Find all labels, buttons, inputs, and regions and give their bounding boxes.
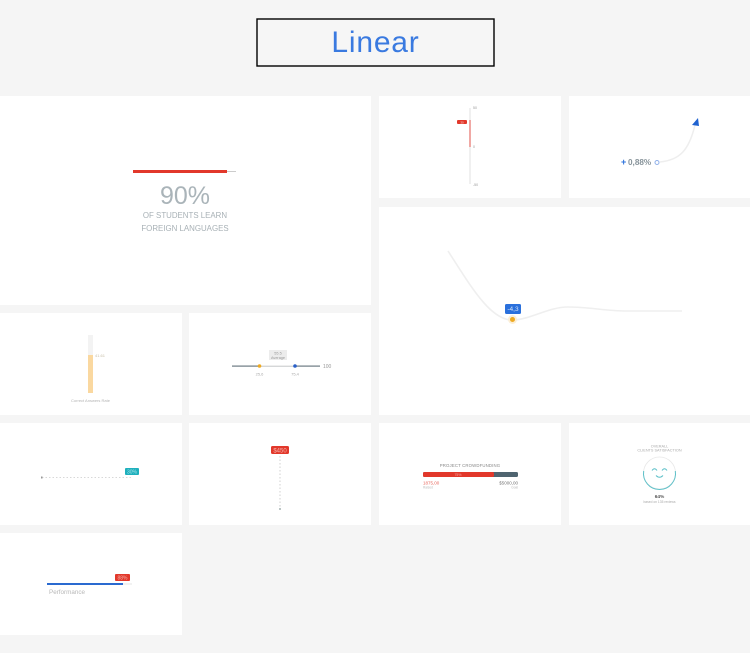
panel: average slider: 100 — [323, 364, 332, 370]
panel: average slider: 75,4 — [291, 372, 300, 376]
title: Linear — [331, 26, 420, 59]
panel: client satisfaction smile: CLIENTS SATISFACTION — [637, 448, 682, 452]
panel: project crowdfunding: $5000,00 — [499, 480, 518, 486]
panel: project crowdfunding: PROJECT CROWDFUNDING — [440, 463, 501, 468]
panel: 90% of students: 90% — [160, 182, 210, 210]
panel: correct answers rate — [0, 313, 182, 415]
panel: correct answers rate: Correct Answers Rate — [71, 398, 111, 403]
panel: project crowdfunding: 1875,00 — [423, 480, 440, 486]
panel: average slider: 55.5 — [274, 352, 282, 356]
panel: project crowdfunding: Goal — [511, 486, 518, 490]
panel: client satisfaction smile: 64% — [655, 494, 665, 500]
panel: horizontal dotted progress: 30% — [127, 470, 138, 476]
panel: line chart: -4,3 — [507, 306, 519, 313]
panel: vertical gauge: 30 — [460, 120, 464, 124]
panel: client satisfaction smile: based on 135 reviews — [643, 500, 676, 504]
panel: vertical gauge — [379, 96, 561, 198]
panel: project crowdfunding: Raised — [423, 486, 433, 490]
panel: vertical gauge: 50 — [473, 106, 477, 110]
panel: growth arrow: 0,88% — [628, 158, 652, 167]
panel: average slider — [189, 313, 371, 415]
panel: project crowdfunding — [379, 423, 561, 525]
panel: average slider: Average — [271, 356, 285, 360]
panel: client satisfaction smile: OVERALL — [651, 444, 668, 448]
panel: growth arrow: + — [621, 157, 626, 167]
panel: performance — [0, 533, 182, 635]
panel: horizontal dotted progress — [0, 423, 182, 525]
panel: 90% of students — [0, 96, 371, 305]
panel: vertical dotted value — [189, 423, 371, 525]
title — [257, 19, 494, 66]
panel: line chart — [379, 207, 750, 415]
panel: client satisfaction smile — [569, 423, 750, 525]
panel: vertical gauge: 0 — [473, 145, 475, 149]
panel: vertical dotted value: $450 — [273, 448, 287, 454]
panel: average slider: 25,6 — [256, 372, 264, 376]
panel: 90% of students: OF STUDENTS LEARN — [143, 211, 227, 220]
panel: 90% of students: FOREIGN LANGUAGES — [141, 224, 229, 233]
panel: correct answers rate: 41.61 — [95, 353, 106, 358]
panel: performance: Performance — [49, 589, 86, 596]
panel: growth arrow — [569, 96, 750, 198]
panel: performance: 88% — [117, 576, 128, 582]
panel: project crowdfunding: 75% — [454, 473, 462, 477]
panel: vertical gauge: -50 — [473, 183, 478, 187]
